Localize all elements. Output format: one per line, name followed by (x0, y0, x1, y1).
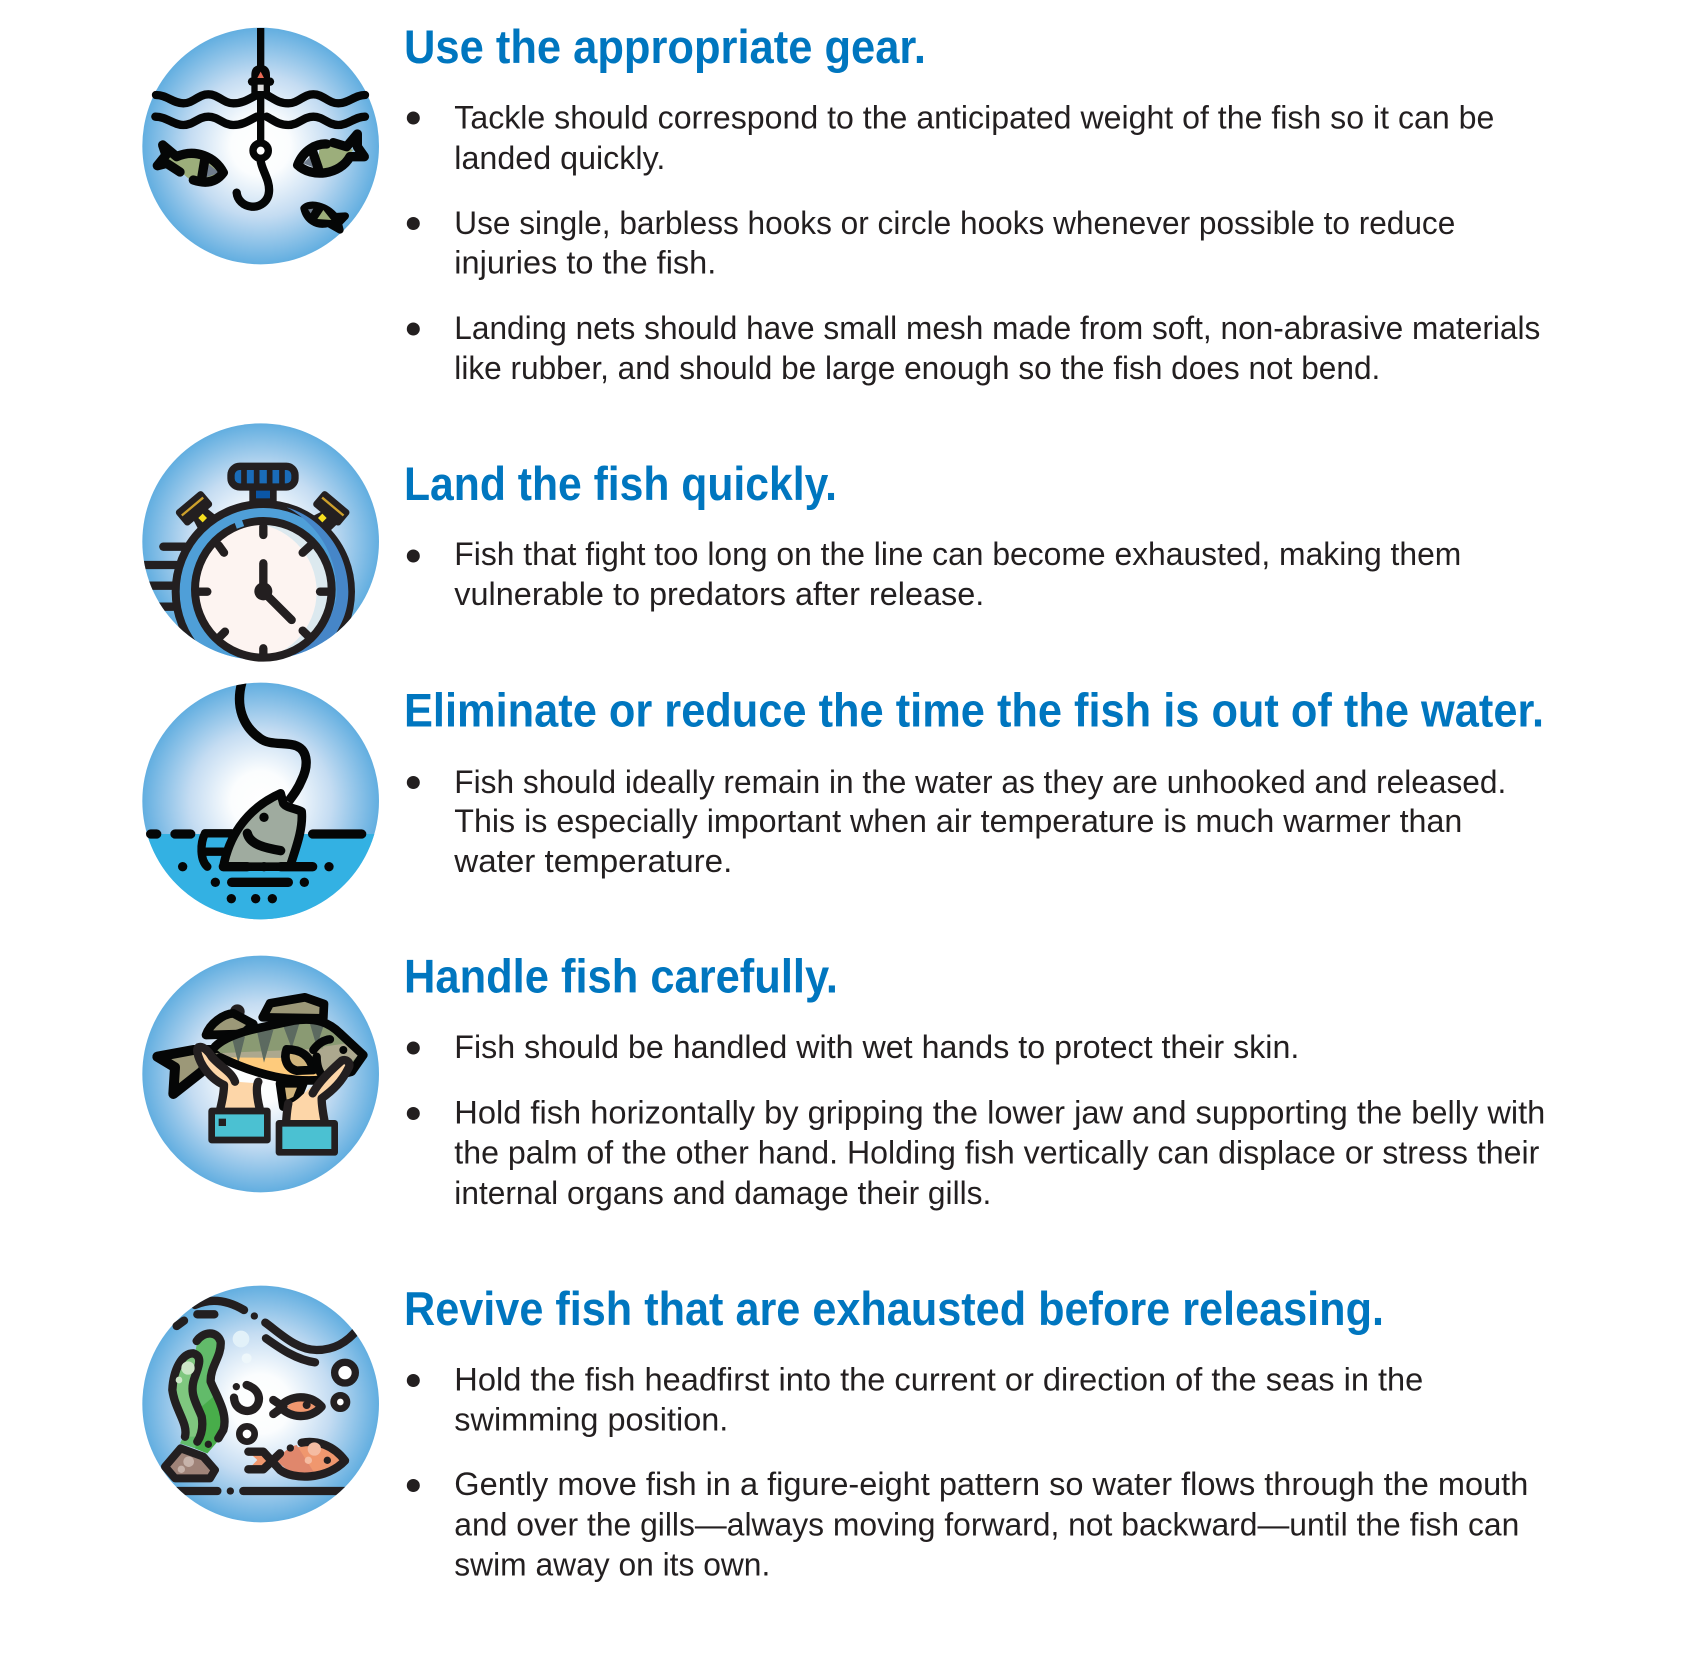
panel: handle fish carefully (142, 950, 1545, 1211)
heading: Use the appropriate gear. (404, 20, 926, 73)
bullet list: Fish should be handled with wet hands to protect their skin. (454, 1029, 1299, 1065)
icon: hooked fish at water surface (140, 682, 380, 924)
bullet list: vulnerable to predators after release. (454, 576, 984, 612)
bullet list: the palm of the other hand. Holding fish vertically can displace or stress their (454, 1134, 1540, 1170)
bullet list: Fish that fight too long on the line can become exhausted, making them (454, 536, 1461, 572)
bullet list: landed quickly. (454, 140, 665, 176)
bullet list (407, 764, 1506, 879)
bullet list (407, 100, 1540, 386)
bullet list: water temperature. (453, 843, 732, 879)
panel: revive exhausted fish (140, 1282, 1528, 1582)
bullet list: like rubber, and should be large enough so the fish does not bend. (454, 350, 1380, 386)
bullet list: internal organs and damage their gills. (454, 1175, 991, 1211)
icon: hands holding fish (142, 956, 379, 1192)
bullet list (407, 1029, 1545, 1211)
bullet list: Hold the fish headfirst into the current or direction of the seas in the (454, 1362, 1423, 1398)
panel: use the appropriate gear (142, 20, 1540, 386)
bullet list: This is especially important when air temperature is much warmer than (454, 803, 1462, 839)
bullet list: and over the gills—always moving forward, not backward—until the fish can (454, 1506, 1519, 1542)
bullet list: swimming position. (454, 1402, 728, 1438)
icon: stopwatch (140, 423, 379, 679)
bullet list: injuries to the fish. (454, 244, 716, 280)
heading: Eliminate or reduce the time the fish is out of the water. (404, 684, 1544, 736)
bullet list: Use single, barbless hooks or circle hooks whenever possible to reduce (454, 205, 1455, 241)
bullet list: Gently move fish in a figure-eight pattern so water flows through the mouth (454, 1466, 1528, 1502)
bullet list: Fish should ideally remain in the water as they are unhooked and released. (454, 764, 1506, 800)
icon: fish and seaweed underwater (140, 1286, 387, 1522)
bullet list (407, 1362, 1528, 1582)
heading: Land the fish quickly. (404, 457, 837, 510)
bullet list: Tackle should correspond to the anticipated weight of the fish so it can be (454, 100, 1494, 136)
bullet list: Landing nets should have small mesh made from soft, non-abrasive materials (454, 310, 1540, 346)
icon: hook and fish (142, 28, 379, 264)
panel: land the fish quickly (140, 423, 1461, 679)
bullet list (407, 536, 1461, 612)
panel: reduce time out of water (140, 682, 1544, 924)
bullet list: Hold fish horizontally by gripping the lower jaw and supporting the belly with (454, 1094, 1545, 1130)
heading: Revive fish that are exhausted before releasing. (404, 1282, 1384, 1335)
bullet list: swim away on its own. (454, 1546, 770, 1582)
heading: Handle fish carefully. (404, 950, 838, 1002)
